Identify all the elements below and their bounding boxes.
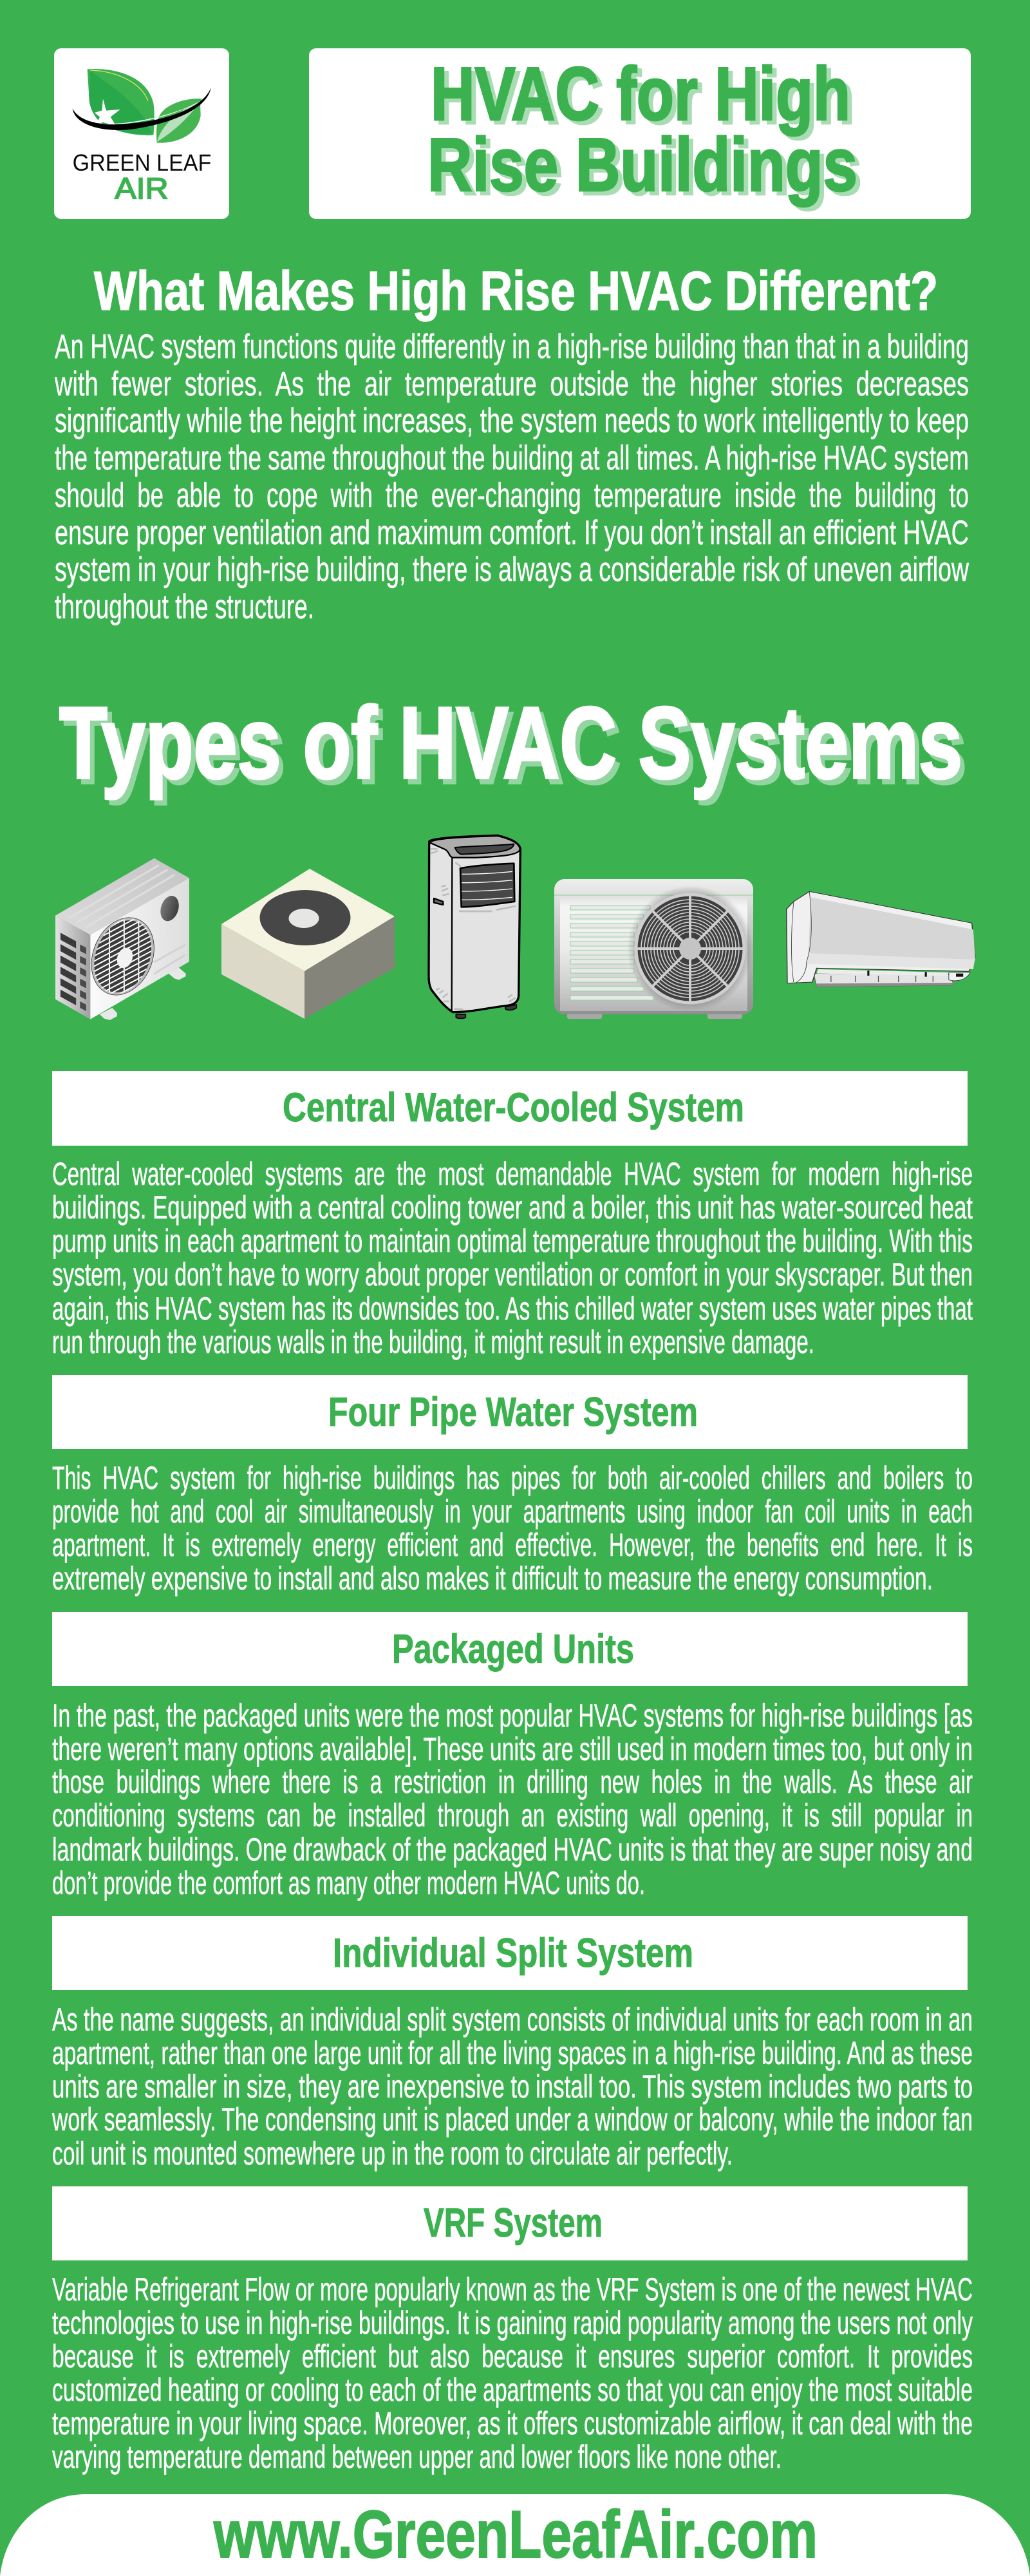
section heading: Individual Split System xyxy=(333,1931,693,1976)
title: Rise Buildings xyxy=(427,122,857,207)
section header bar xyxy=(52,1375,968,1449)
panel: packaged units xyxy=(52,1612,973,1901)
footer xyxy=(0,2494,1030,2576)
title xyxy=(427,52,857,207)
section heading: Central Water-Cooled System xyxy=(283,1085,744,1130)
panel: individual split system xyxy=(52,1916,973,2172)
section body text xyxy=(52,1698,973,1901)
section heading: Four Pipe Water System xyxy=(328,1390,698,1435)
section header bar xyxy=(52,1071,968,1146)
section body text xyxy=(52,1156,973,1360)
title: HVAC for High xyxy=(431,52,850,136)
slats xyxy=(570,905,653,1000)
section heading: Packaged Units xyxy=(392,1627,634,1672)
icon: isometric outdoor ac unit xyxy=(55,858,189,1020)
panel: vrf system xyxy=(52,2186,973,2475)
icon: front view condenser unit xyxy=(554,879,753,1019)
section header bar xyxy=(52,2186,968,2260)
icon: isometric cube ac unit xyxy=(221,869,395,1019)
title panel xyxy=(309,48,971,219)
section header bar xyxy=(52,1916,968,1990)
intro paragraph: throughout the structure. xyxy=(55,588,314,626)
section body text xyxy=(52,2002,973,2172)
panel: central water-cooled system xyxy=(52,1071,973,1360)
section heading: VRF System xyxy=(424,2201,603,2246)
logo panel xyxy=(54,48,229,219)
intro paragraph xyxy=(54,328,969,626)
section body text: don’t provide the comfort as many other modern HVAC units do. xyxy=(52,1865,645,1901)
icon: green leaves logo: AIR xyxy=(115,171,169,205)
section body text xyxy=(52,1460,973,1596)
footer url: www.GreenLeafAir.com xyxy=(213,2497,818,2572)
panel: four pipe water system xyxy=(52,1375,973,1596)
section body text xyxy=(52,2271,973,2475)
section header bar xyxy=(52,1612,968,1686)
icon: wall mounted split ac xyxy=(787,891,975,987)
icon: portable ac tower xyxy=(429,835,520,1018)
icon: green leaves logo xyxy=(73,69,211,205)
icon: green leaves logo: GREEN LEAF xyxy=(73,149,211,176)
